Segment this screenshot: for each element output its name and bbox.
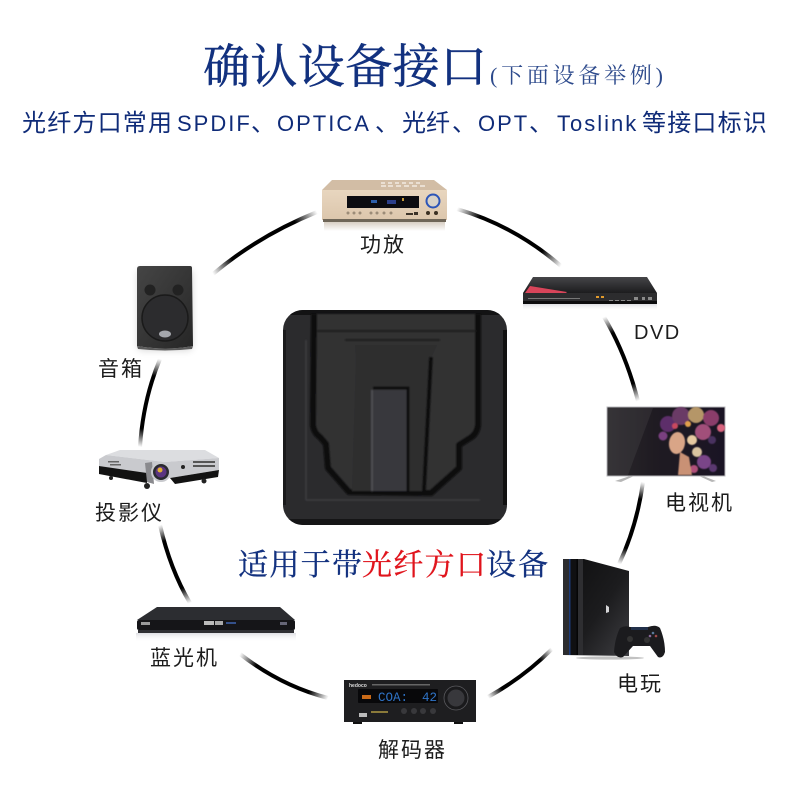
interface description line: SPDIF <box>177 111 252 136</box>
suitable-for caption: 设备 <box>486 549 548 582</box>
interface description line: 等接口标识 <box>642 110 768 137</box>
label: DVD: DVD <box>634 322 681 344</box>
subtitle note: (下面设备举例) <box>490 63 663 88</box>
label: television: 电视机 <box>665 492 734 515</box>
interface description line: 、 <box>251 110 275 137</box>
tv picture: portrait with flowers <box>658 407 725 475</box>
device: audio decoder: 42 <box>422 691 437 705</box>
device: audio decoder: hedoco <box>349 683 367 689</box>
label: amplifier: 功放 <box>360 234 406 257</box>
plug inner T shape <box>351 361 430 492</box>
label: blu-ray player: 蓝光机 <box>150 647 219 670</box>
game controller <box>614 626 665 657</box>
interface description line: 、 <box>529 110 553 137</box>
device: DVD player <box>523 277 657 311</box>
device: game console <box>563 559 665 660</box>
interface description line: OPTICA <box>277 111 371 136</box>
interface description line: Toslink <box>557 111 638 136</box>
device: speaker <box>137 266 193 350</box>
label: speaker: 音箱 <box>98 358 144 381</box>
label: audio decoder: 解码器 <box>378 739 447 762</box>
label: game console: 电玩 <box>617 673 663 696</box>
suitable-for caption <box>238 549 548 582</box>
label: projector: 投影仪 <box>95 502 164 525</box>
optical square port plug <box>283 310 507 525</box>
interface description line: 、 <box>375 110 399 137</box>
device: audio decoder: COA: <box>378 691 408 705</box>
suitable-for caption: 适用于带 <box>238 549 362 582</box>
interface description line: 光纤 <box>402 110 450 137</box>
interface description line: 光纤方口常用 <box>22 110 173 137</box>
plug inner recess <box>306 314 480 500</box>
device: blu-ray player <box>136 607 296 642</box>
device: audio decoder <box>344 680 476 724</box>
interface description line: 、 <box>452 110 476 137</box>
interface description line: OPT <box>478 111 529 136</box>
title: 确认设备接口 <box>203 42 487 94</box>
ring of arc connectors <box>140 209 643 698</box>
device: amplifier <box>322 180 447 231</box>
device: projector <box>99 450 219 489</box>
suitable-for caption: 光纤方口 <box>362 549 486 582</box>
device: television <box>607 407 725 482</box>
